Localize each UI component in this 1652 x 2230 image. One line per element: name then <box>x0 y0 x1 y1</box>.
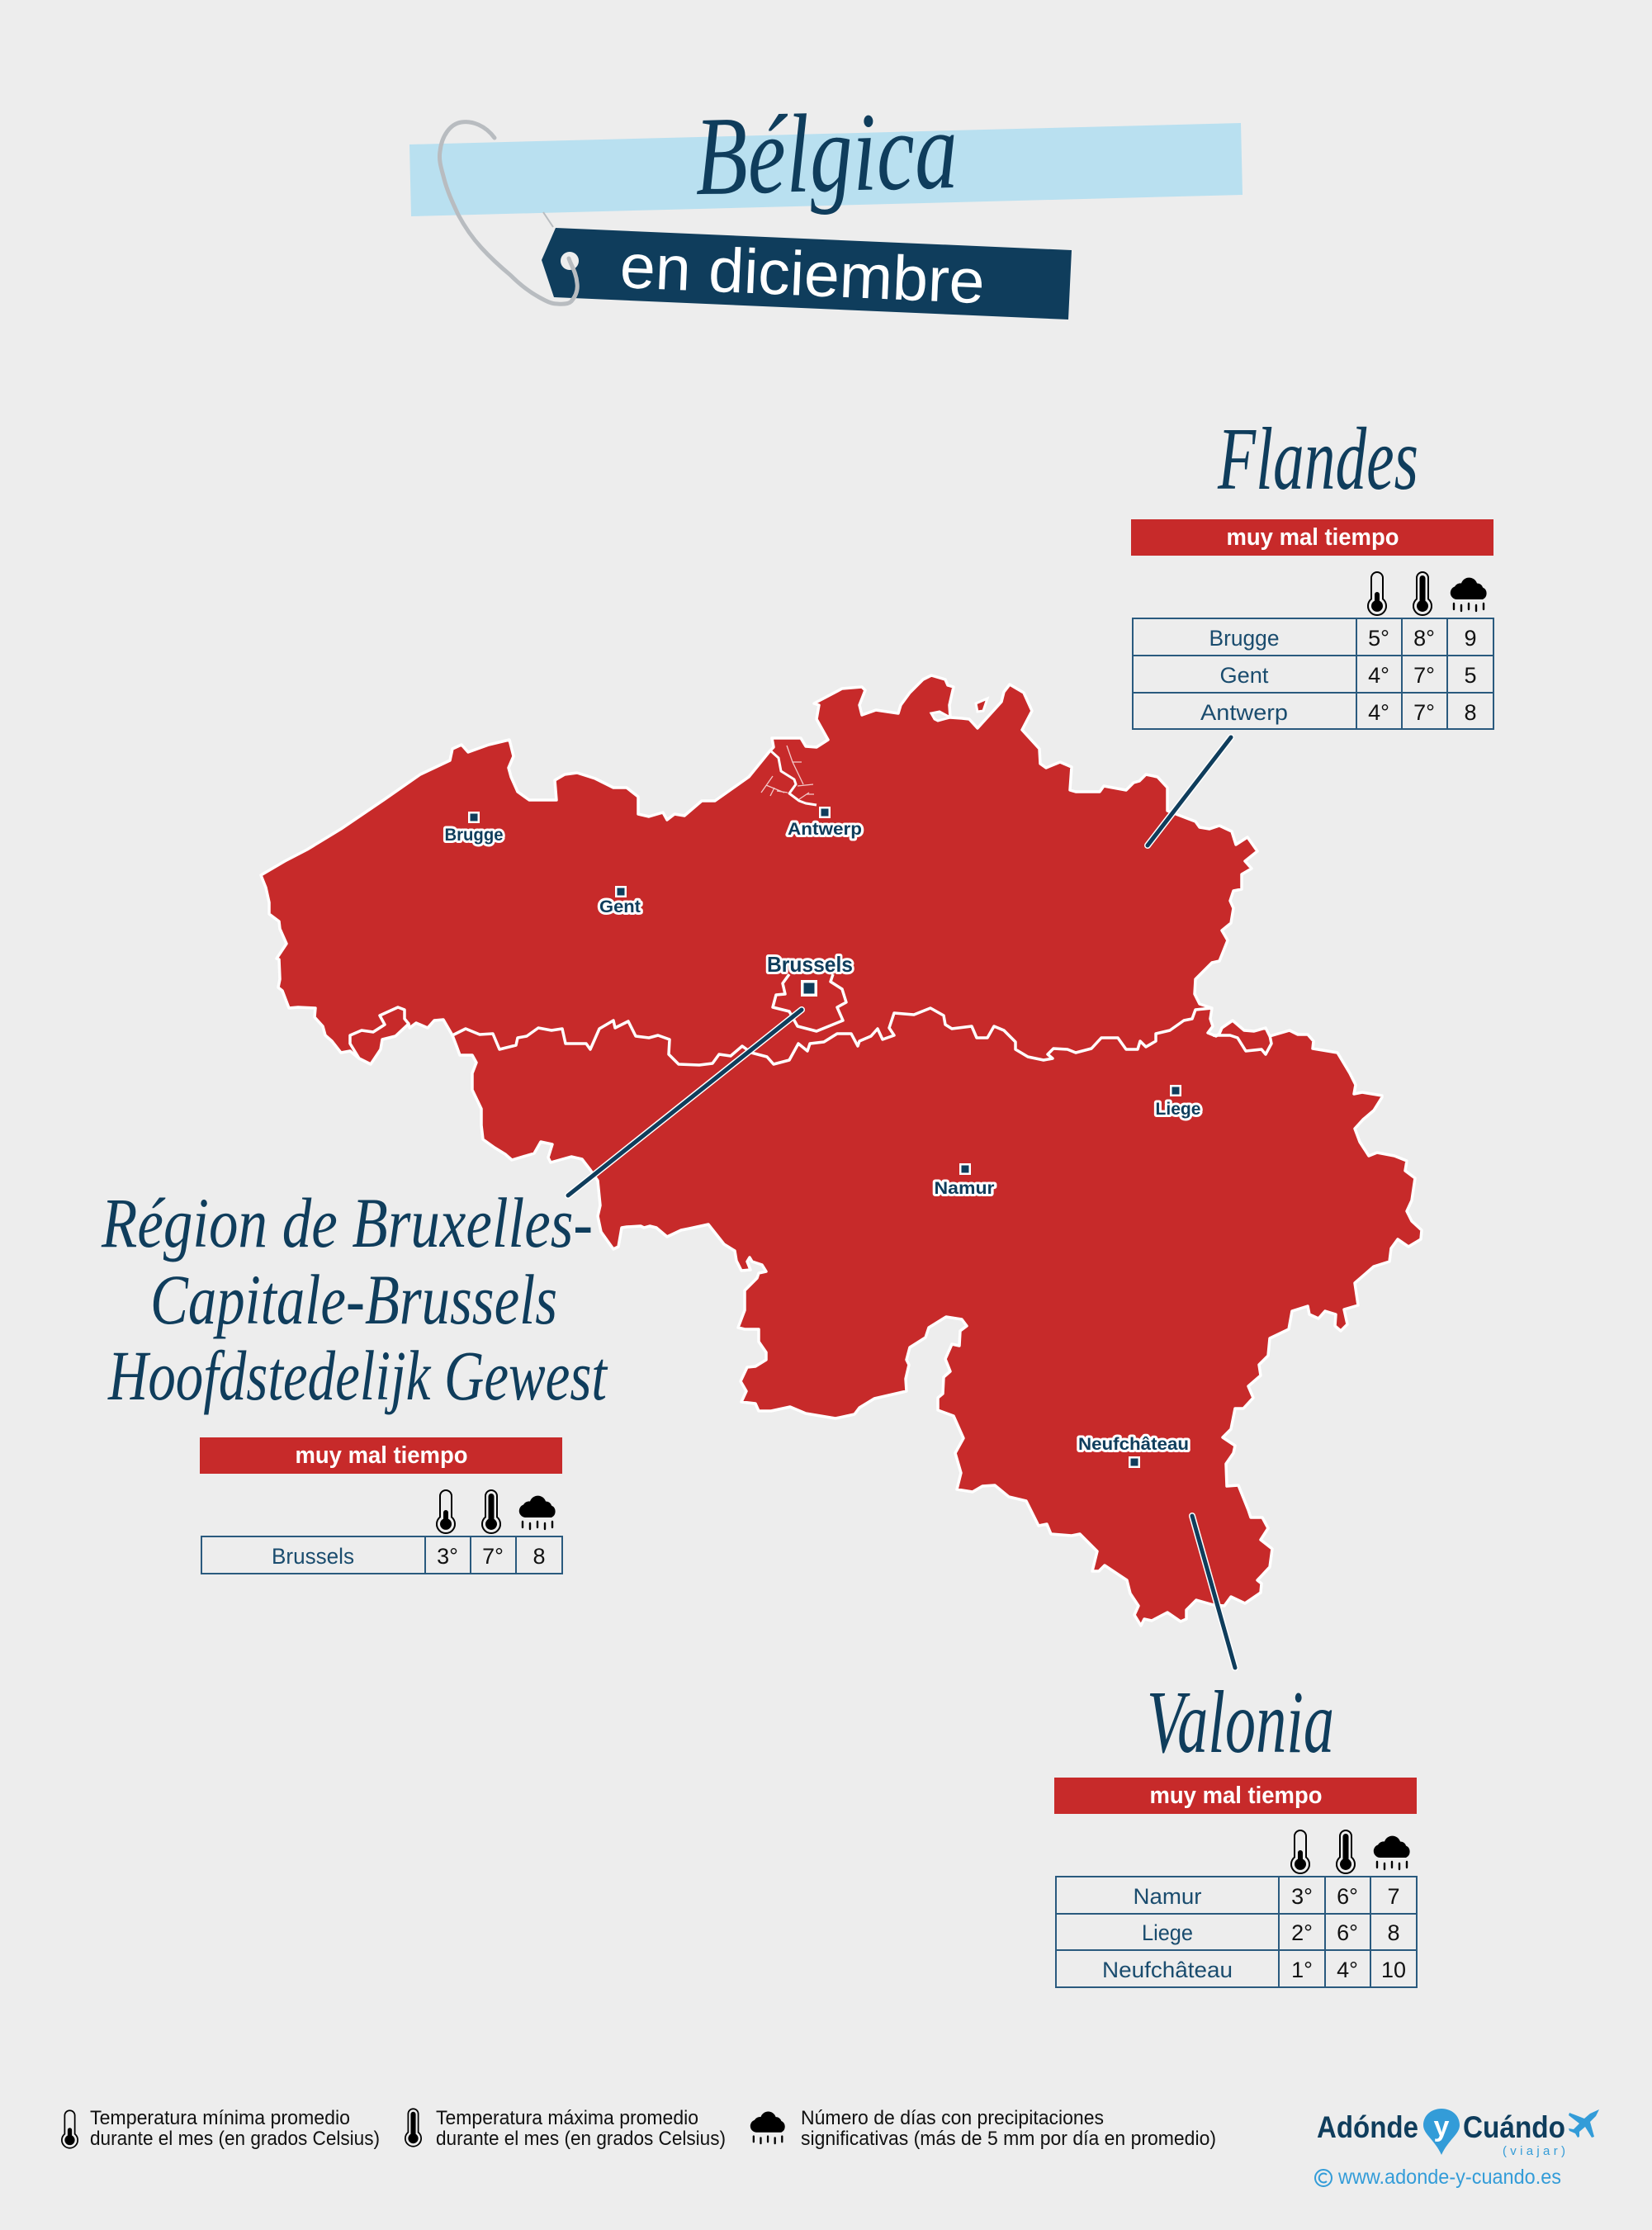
weather table: 7° <box>1413 700 1435 725</box>
weather table: 9 <box>1464 626 1477 651</box>
boundary: Brussels region <box>773 974 846 1031</box>
heading line 1: Région de Bruxelles- <box>101 1183 593 1262</box>
panel: Flandes <box>1131 519 1493 729</box>
weather table: Antwerp <box>1200 700 1288 725</box>
icon: min temperature <box>437 1490 455 1533</box>
panel: Brussels <box>200 1437 562 1574</box>
thin tag string <box>543 212 553 227</box>
legend text: max temperature: Temperatura máxima promedio <box>436 2107 698 2129</box>
city marker: Brussels <box>801 980 817 997</box>
weather table: 8 <box>1464 700 1477 725</box>
city label: Namur: Namur <box>935 1179 994 1198</box>
weather table: 2° <box>1291 1920 1313 1945</box>
city marker: Namur <box>959 1163 971 1175</box>
heading: Région de Bruxelles-Capitale <box>101 1183 608 1415</box>
status bar <box>1131 519 1493 556</box>
city marker: Neufchâteau <box>1129 1456 1140 1468</box>
legend text: rain: Número de días con precipitaciones <box>801 2107 1104 2129</box>
logo: Adónde y Cuándo <box>1315 2109 1599 2189</box>
legend text: min temperature: Temperatura mínima promedio <box>90 2107 350 2129</box>
city marker: Antwerp <box>819 807 831 818</box>
map shape <box>261 675 1422 1626</box>
weather table: Liege <box>1142 1920 1193 1945</box>
callout line: Valonia <box>1192 1516 1235 1668</box>
icon: plane <box>1569 2109 1599 2138</box>
icon: min temperature <box>1368 572 1386 615</box>
weather table: 1° <box>1291 1958 1313 1982</box>
copyright mark <box>1315 2170 1332 2186</box>
logo word: Cuándo: Cuándo <box>1463 2110 1565 2144</box>
weather table: 7° <box>482 1544 504 1569</box>
status bar: muy mal tiempo <box>1149 1783 1323 1809</box>
weather table: 3° <box>1291 1884 1313 1909</box>
status bar: muy mal tiempo <box>296 1442 467 1469</box>
status bar <box>200 1437 562 1474</box>
icon: min temperature <box>1291 1830 1309 1873</box>
weather table: Gent <box>1220 663 1269 688</box>
weather table: 4° <box>1368 700 1389 725</box>
weather table <box>1133 618 1493 729</box>
weather table: Neufchâteau <box>1102 1958 1233 1982</box>
panel: Valonia <box>1054 1778 1417 1987</box>
logo y: y <box>1434 2111 1450 2142</box>
dark tag shape <box>542 228 1072 320</box>
weather table: 10 <box>1381 1958 1406 1982</box>
weather table: 6° <box>1337 1884 1358 1909</box>
city label: Brugge: Brugge <box>444 826 504 845</box>
legend <box>62 2107 1216 2150</box>
title: Bélgica: Bélgica <box>693 88 959 219</box>
city label: Brussels: Brussels <box>767 952 853 977</box>
region boundary: Flanders / Wallonia <box>452 1008 1212 1065</box>
weather table: 8 <box>533 1544 546 1569</box>
tag string loop <box>439 122 577 304</box>
weather table: 8 <box>1387 1920 1400 1945</box>
logo pin <box>1423 2109 1460 2155</box>
weather table: 4° <box>1337 1958 1358 1982</box>
city marker: Liege <box>1170 1085 1181 1096</box>
city label: Liege: Liege <box>1156 1100 1200 1119</box>
callout line: Brussels <box>568 1010 802 1195</box>
city label: Antwerp: Antwerp <box>788 820 862 839</box>
map of Belgium <box>261 675 1422 1626</box>
icon: rain <box>1374 1836 1410 1869</box>
logo tagline: (viajar) <box>1503 2144 1565 2158</box>
heading: Valonia: Valonia <box>1147 1674 1334 1772</box>
enclave hole near Baarle <box>931 712 950 721</box>
website: www.adonde-y-cuando.es <box>1337 2166 1561 2189</box>
heading line 2: Capitale-Brussels <box>150 1260 557 1339</box>
icon: max temperature <box>1413 572 1432 615</box>
weather table: 3° <box>437 1544 458 1569</box>
icon: max temperature <box>1337 1830 1355 1873</box>
Antwerp docks <box>761 746 814 799</box>
legend text: min temperature: durante el mes (en grados Celsius) <box>90 2128 380 2150</box>
weather table: 5° <box>1368 626 1389 651</box>
callout line: Flandes <box>1148 737 1231 845</box>
light blue title band <box>409 123 1243 216</box>
weather table: 4° <box>1368 663 1389 688</box>
subtitle: en diciembre: en diciembre <box>618 231 987 317</box>
weather table: 7 <box>1387 1884 1400 1909</box>
status bar: muy mal tiempo <box>1227 524 1399 551</box>
legend text: min temperature <box>90 2107 380 2150</box>
Baarle island <box>976 698 987 712</box>
weather table: Namur <box>1133 1884 1202 1909</box>
heading line 3: Hoofdstedelijk Gewest <box>107 1336 608 1415</box>
icon: rain <box>519 1496 556 1529</box>
weather table <box>1056 1877 1417 1987</box>
weather table: 5 <box>1464 663 1477 688</box>
city label: Neufchâteau: Neufchâteau <box>1078 1435 1189 1454</box>
legend icon: rain <box>750 2112 785 2143</box>
city marker: Brugge <box>468 812 480 823</box>
legend text: rain <box>801 2107 1216 2150</box>
icon: max temperature <box>482 1490 500 1533</box>
heading: Flandes: Flandes <box>1217 410 1418 509</box>
boundary: Voeren enclave <box>1213 1035 1271 1054</box>
legend text: max temperature: durante el mes (en grados Celsius) <box>436 2128 726 2150</box>
weather table: 6° <box>1337 1920 1358 1945</box>
legend text: max temperature <box>436 2107 726 2150</box>
weather table: 8° <box>1413 626 1435 651</box>
Antwerp river <box>770 750 817 805</box>
weather table <box>201 1536 562 1574</box>
legend icon: max temperature <box>405 2109 421 2147</box>
weather table: Brussels <box>272 1544 354 1569</box>
header: title and tag <box>409 88 1243 320</box>
weather table: Brugge <box>1209 626 1280 651</box>
boundary: Comines enclave <box>350 1007 409 1058</box>
city marker: Gent <box>615 886 627 897</box>
logo word: Adónde: Adónde <box>1317 2110 1418 2144</box>
legend text: rain: significativas (más de 5 mm por día en promedio) <box>801 2128 1216 2150</box>
status bar <box>1054 1778 1417 1814</box>
icon: rain <box>1451 578 1487 611</box>
legend icon: min temperature <box>62 2110 78 2148</box>
city label: Gent: Gent <box>599 897 641 916</box>
weather table: 7° <box>1413 663 1435 688</box>
